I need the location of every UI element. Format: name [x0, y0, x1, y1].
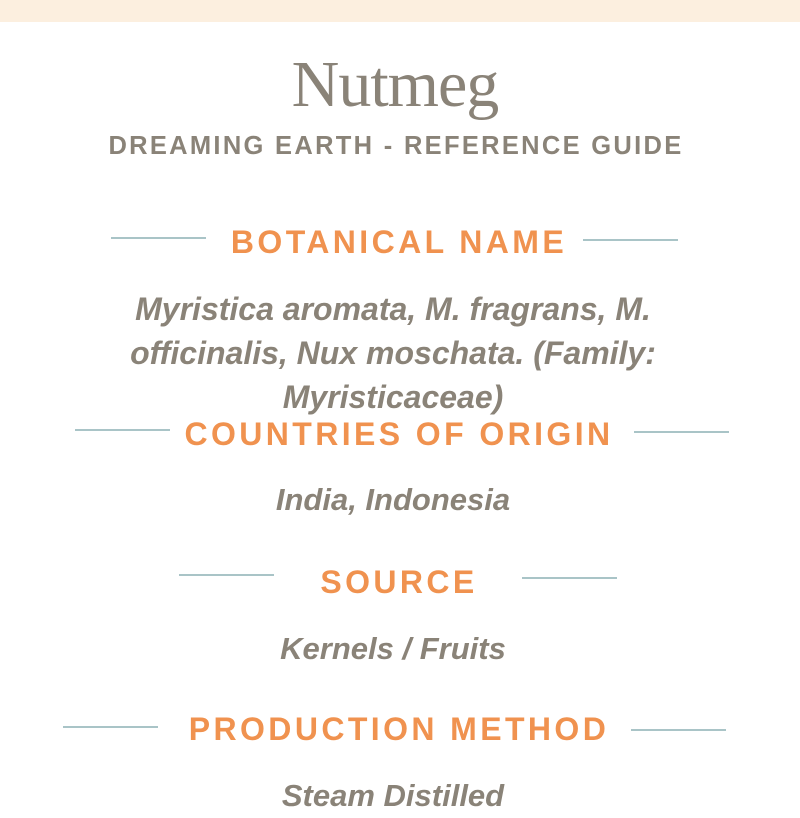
text: botanical name: officinalis, Nux moschata. (Family: [130, 335, 656, 371]
heading: countries of origin: COUNTRIES OF ORIGIN [184, 416, 614, 452]
top band [0, 0, 800, 22]
subtitle: DREAMING EARTH - REFERENCE GUIDE [108, 132, 684, 160]
text: botanical name: Myristicaceae) [283, 379, 503, 415]
text: countries: India, Indonesia [276, 482, 510, 517]
text: botanical name [130, 291, 656, 415]
text: source: Kernels / Fruits [280, 631, 506, 666]
text: botanical name: Myristica aromata, M. fragrans, M. [135, 291, 651, 327]
heading: botanical name: BOTANICAL NAME [231, 224, 567, 260]
title: Nutmeg [292, 48, 498, 121]
heading: production method: PRODUCTION METHOD [189, 711, 609, 747]
heading: source: SOURCE [320, 564, 478, 600]
text: production method: Steam Distilled [282, 778, 504, 813]
